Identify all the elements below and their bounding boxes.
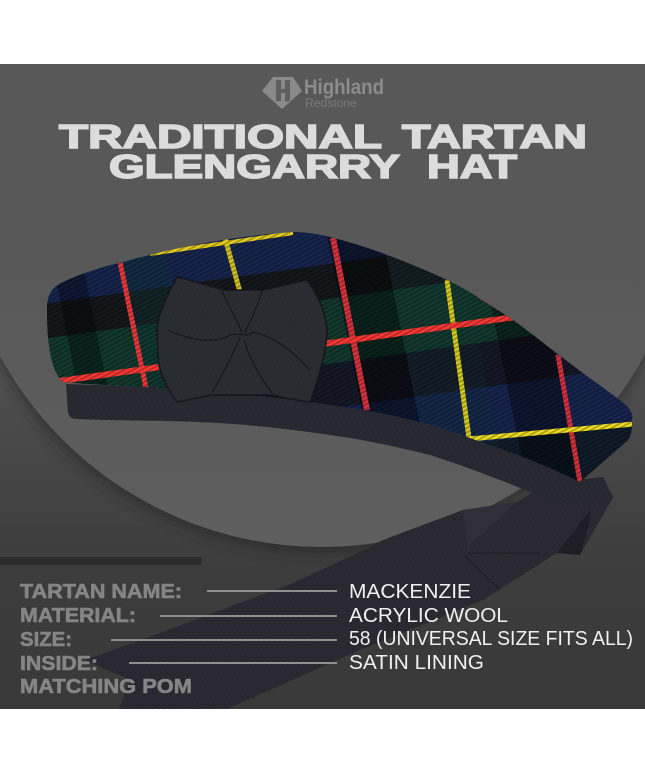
bow knot folds (168, 291, 310, 393)
title: TARTAN (402, 118, 587, 155)
bow (157, 277, 327, 402)
logo wordmark (304, 75, 384, 110)
title: GLENGARRY (109, 148, 400, 185)
twill texture (47, 232, 632, 482)
spec: inside: SATIN LINING (349, 651, 484, 674)
spec: tartan name: TARTAN NAME: (20, 580, 182, 603)
large circle backdrop (0, 355, 645, 554)
spec list (20, 580, 633, 698)
ribbon tails (85, 477, 613, 709)
hat (47, 232, 632, 709)
horizontal tartan bands (47, 256, 632, 480)
logo wordmark: Redstone (305, 96, 357, 110)
tartan lines (60, 233, 634, 482)
spec: size (20, 627, 633, 651)
vertical tartan bands (57, 236, 577, 480)
title: HAT (427, 148, 517, 185)
hat band (66, 384, 613, 500)
spec: material: ACRYLIC WOOL (349, 604, 508, 627)
tartan crown (47, 232, 632, 482)
divider bar (0, 557, 202, 565)
spec: tartan name: MACKENZIE (349, 580, 471, 603)
logo wordmark: Highland (304, 75, 384, 99)
spec: tartan name (20, 580, 471, 603)
spec: material (20, 604, 508, 627)
spec: size: 58 (UNIVERSAL SIZE FITS ALL) (349, 627, 633, 650)
spec: material: MATERIAL: (20, 604, 136, 627)
title: TRADITIONAL (59, 118, 382, 155)
spec: inside (20, 651, 484, 675)
logo (262, 75, 384, 110)
spec: size: SIZE: (20, 628, 72, 651)
spec: matching pom: MATCHING POM (20, 675, 192, 698)
title (59, 118, 587, 185)
icon: diamond logo mark (262, 77, 302, 109)
spec: inside: INSIDE: (20, 652, 98, 675)
